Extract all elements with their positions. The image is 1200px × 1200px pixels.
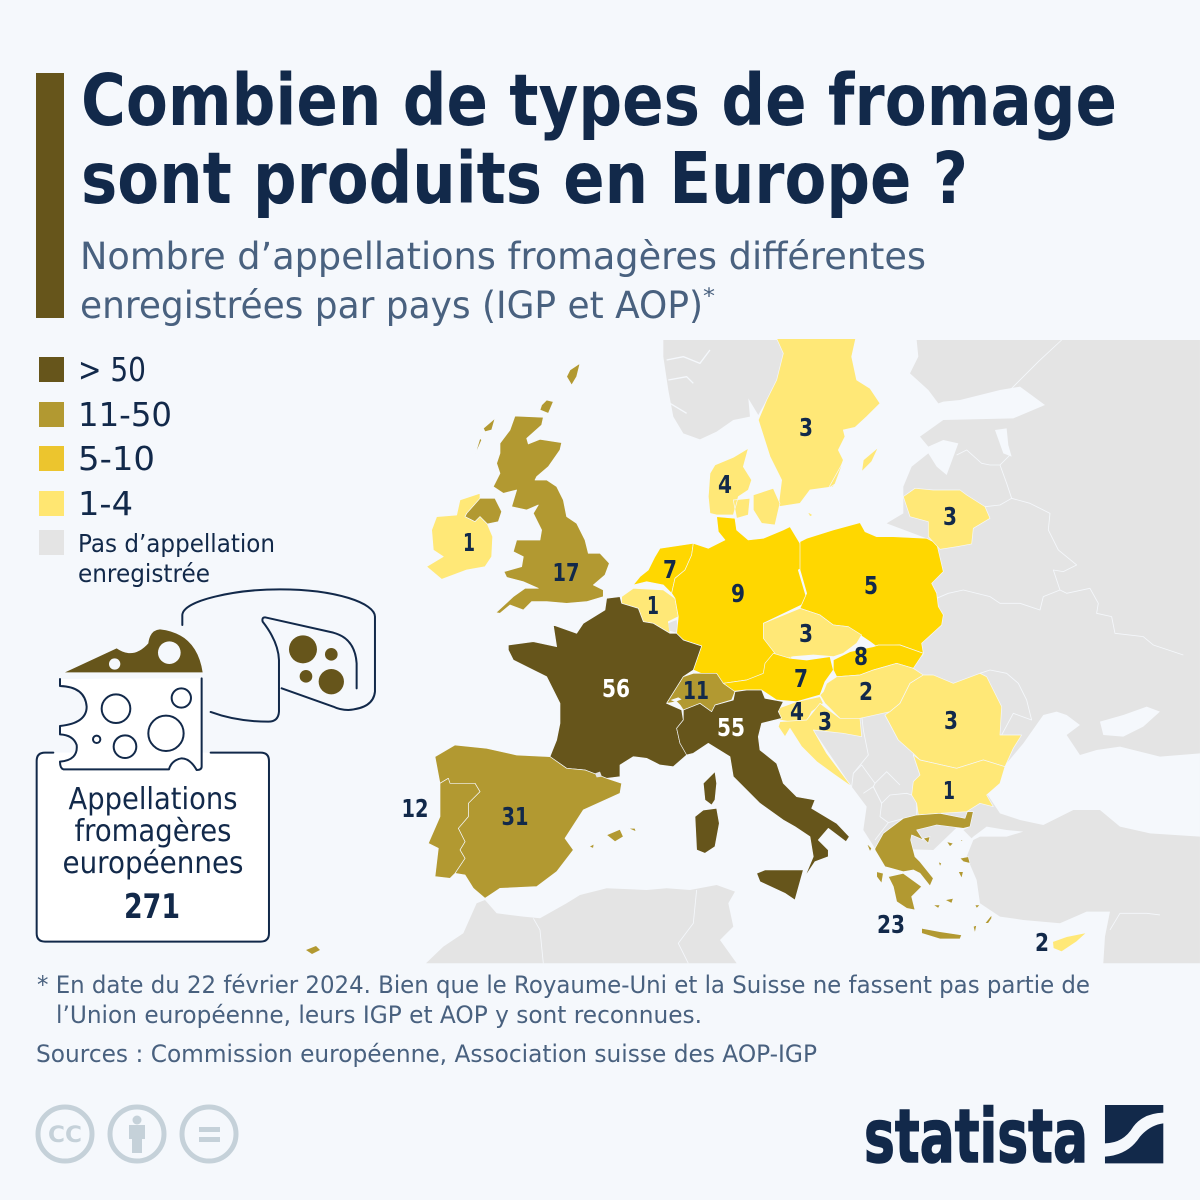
Cyprus [1053,933,1087,952]
Norway fjords [667,350,710,413]
country values: 2 [859,677,873,706]
Bulgaria [912,755,1005,815]
Germany [672,517,807,683]
country values: 23 [877,910,905,939]
Statista wordmark: statista [864,1094,1088,1180]
country values: 3 [799,619,813,648]
Slovenia [778,697,823,722]
subtitle: Nombre d’appellations fromagères différentes [80,235,926,278]
country values: 4 [790,697,804,726]
Italy [677,690,849,877]
Statista logo mark [1105,1105,1163,1163]
footnote: Sources : Commission européenne, Association suisse des AOP-IGP [36,1040,817,1068]
legend: Pas d’appellation [78,529,275,558]
Denmark [708,448,780,525]
country values: 3 [818,707,832,736]
subtitle: enregistrées par pays (IGP et AOP) [80,284,703,327]
Czechia [763,608,862,660]
footnote: * En date du 22 février 2024. Bien que le Royaume-Uni et la Suisse ne fassent pas partie de [37,971,1090,999]
France [508,597,702,778]
icon: creative commons licence [38,1107,236,1161]
country values: 5 [864,571,878,600]
country values: 11 [683,676,709,705]
Lithuania [903,488,990,549]
country values: 17 [552,558,580,587]
country values: 3 [944,706,958,735]
Netherlands [633,543,693,593]
Romania [885,673,1022,768]
legend: 11-50 [78,395,172,434]
Sea of Azov [1100,707,1160,737]
Slovakia [833,645,923,677]
country values: 1 [943,776,955,805]
United Kingdom [465,363,609,613]
icon: creative commons licence: CC [48,1123,82,1148]
subtitle [80,235,926,327]
country values: 8 [854,642,868,671]
Swedish islands [807,447,878,517]
country values: 7 [663,555,677,584]
country values [402,413,1049,957]
legend: enregistrée [78,559,210,588]
Croatia [778,703,862,787]
legend: > 50 [78,350,146,389]
country values: 3 [943,502,957,531]
Black Sea [987,712,1200,837]
country values: 31 [502,802,528,831]
Corsica and Sardinia [695,772,719,853]
Ireland [427,493,493,579]
callout text: européennes [62,846,244,881]
accent bar [36,73,64,318]
legend [39,350,275,588]
country values: 2 [1035,928,1049,957]
callout text: Appellations [68,782,238,817]
Lake Geneva [671,697,682,702]
map of Europe [306,339,1200,963]
legend: 5-10 [78,439,155,478]
Sea of Marmara [967,827,1023,843]
title: sont produits en Europe ? [81,137,968,220]
Sweden [758,339,880,507]
country values: 3 [799,413,813,442]
borders of non-registered countries [937,340,1183,655]
Balkan and Moldova borders [852,670,1160,930]
footnote [36,971,1090,1068]
callout text: 271 [124,887,180,927]
North Africa borders [533,890,697,963]
non-registered land: Norway [663,340,785,439]
Andorra [595,772,602,777]
country values: 56 [602,674,630,703]
non-registered land: North Africa [426,885,737,963]
country values: 7 [794,664,808,693]
country values: 55 [717,713,745,742]
Austria [723,653,833,702]
callout text: fromagères [74,814,232,849]
icon: cheese slice [60,629,203,770]
title [81,59,1117,220]
country values: 9 [731,579,745,608]
callout: total cheese appellations [37,589,375,942]
Luxembourg [668,620,678,633]
box [37,753,269,942]
subtitle: * [703,284,715,308]
country values: 1 [463,528,475,557]
callout text [62,782,244,927]
country values: 4 [718,470,732,499]
legend: 1-4 [78,484,133,523]
Hungary [820,663,923,718]
Sicily [757,870,803,900]
Greece [867,812,992,939]
Lake Peipus [995,428,1012,457]
Canary Islands [306,946,320,954]
footnote: l’Union européenne, leurs IGP et AOP y sont reconnues. [56,1001,702,1029]
country values: 1 [647,591,659,620]
icon: cheese wheel [182,589,375,722]
Spain [435,745,636,898]
Belgium [622,588,678,633]
country values: 12 [402,794,428,823]
non-registered land: east [813,340,1200,963]
Switzerland [667,673,735,712]
Poland [800,523,943,653]
Portugal [428,778,480,878]
